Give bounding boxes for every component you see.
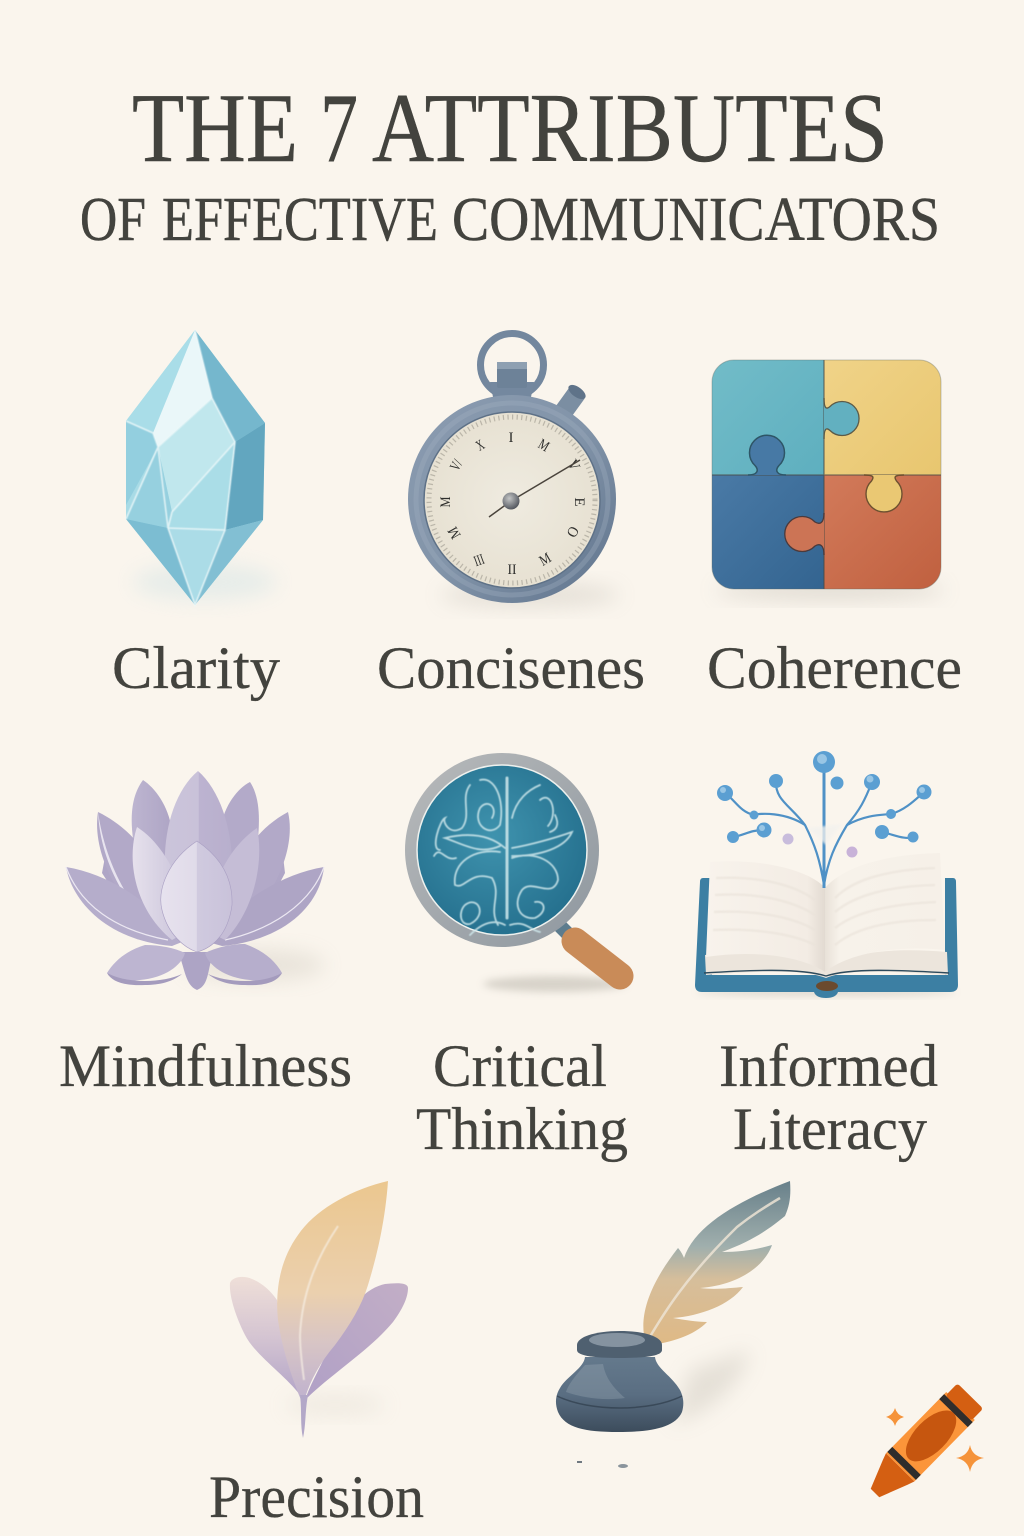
title: THE: [132, 74, 298, 183]
label: Concisenes: Concisenes: [377, 635, 645, 701]
label: Informed Literacy: [719, 1033, 938, 1162]
label: Informed Literacy: Literacy: [733, 1096, 927, 1162]
label: Precision: Precision: [209, 1464, 424, 1530]
icon: crystal: [126, 330, 277, 605]
puzzle piece: yellow: [824, 360, 942, 475]
dial numerals: O: [563, 523, 582, 540]
icon: stopwatch: [408, 334, 620, 607]
panel: critical thinking: [405, 753, 628, 1162]
dial numerals: X: [473, 437, 488, 455]
icon: petal flower: [230, 1181, 408, 1438]
dial numerals: M: [438, 496, 454, 508]
dial numerals: M: [537, 550, 554, 570]
sparkle: [956, 1445, 984, 1472]
icon: crayon logo: [861, 1382, 985, 1507]
dial numerals: I: [508, 430, 514, 446]
panel: clarity: [112, 330, 280, 701]
title: [80, 74, 940, 254]
dial numerals: V/: [447, 457, 467, 474]
icon: puzzle: [712, 360, 945, 599]
label: Critical Thinking: [416, 1033, 628, 1162]
panel: informed literacy: [695, 751, 958, 1162]
brain sketch: [434, 778, 572, 935]
dial numerals: II: [508, 562, 516, 578]
label: Critical Thinking: Critical: [433, 1033, 607, 1099]
panel: coherence: [707, 360, 962, 701]
panel: mindfulness: [59, 771, 352, 1099]
sparkle: [886, 1408, 904, 1426]
subtitle: [80, 186, 940, 254]
puzzle piece: blue: [712, 475, 824, 590]
label: Critical Thinking: Thinking: [416, 1096, 628, 1162]
panel: conciseness: [377, 334, 645, 701]
puzzle piece: teal: [712, 360, 824, 475]
panel: precision: [209, 1181, 424, 1530]
dial numerals: III: [472, 552, 487, 570]
knowledge tree: [725, 765, 924, 888]
dial numerals: M: [445, 524, 465, 541]
dial numerals: E: [571, 498, 587, 506]
dial numerals: V: [564, 457, 583, 474]
label: Informed Literacy: Informed: [719, 1033, 938, 1099]
subtitle: COMMUNICATORS: [452, 186, 940, 254]
label: Clarity: Clarity: [112, 635, 280, 701]
subtitle: OF: [80, 186, 146, 254]
title: 7: [320, 74, 358, 183]
dial numerals: M: [535, 436, 552, 455]
icon: quill and inkwell: [556, 1181, 790, 1468]
label: Mindfulness: Mindfulness: [59, 1033, 352, 1099]
label: Coherence: Coherence: [707, 635, 962, 701]
icon: lotus: [66, 771, 325, 990]
icon: magnifying glass: [405, 753, 627, 992]
dial numerals: [438, 430, 587, 578]
title: ATTRIBUTES: [372, 74, 888, 183]
icon: open book: [695, 751, 958, 998]
puzzle piece: orange: [824, 475, 942, 590]
subtitle: EFFECTIVE: [162, 186, 438, 254]
